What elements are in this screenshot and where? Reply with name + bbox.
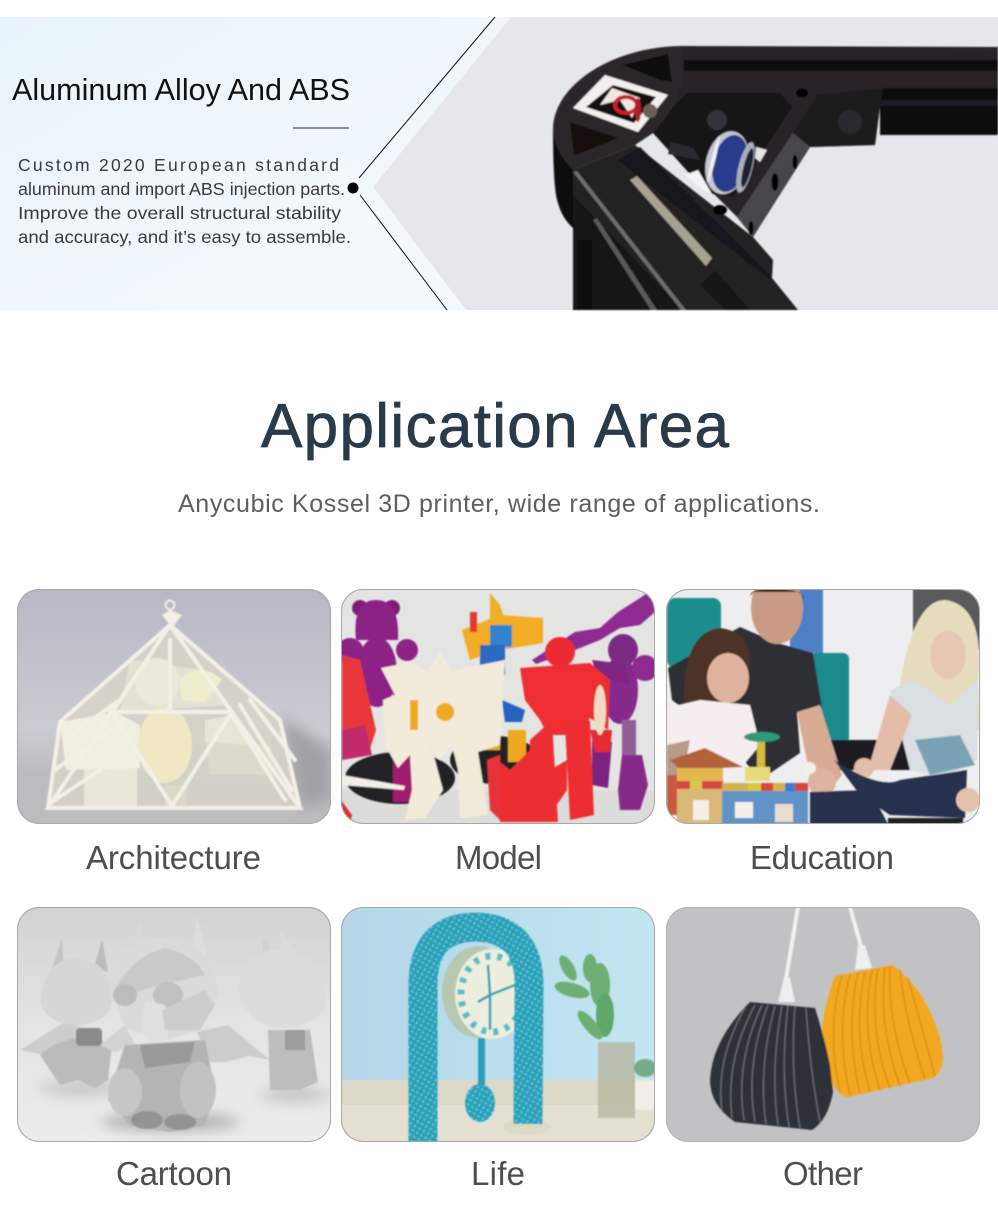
connector lines <box>359 17 495 310</box>
center helmet <box>122 1012 193 1038</box>
center wings <box>197 1025 270 1062</box>
arch <box>423 927 529 1142</box>
aluminum extrusion cross-section <box>573 75 668 132</box>
orange lamp <box>821 965 943 1097</box>
banner body copy: Improve the overall structural stability <box>18 203 341 223</box>
card: other <box>666 907 980 1192</box>
yellow robot <box>462 615 543 660</box>
card: architecture <box>17 589 331 876</box>
card: life <box>341 907 656 1192</box>
bracket window <box>653 93 792 197</box>
cords <box>785 907 798 985</box>
right grey photo background <box>373 17 998 310</box>
right figure <box>280 930 296 965</box>
bracket plate <box>653 83 883 237</box>
white robot <box>381 652 505 820</box>
card: model <box>336 589 658 876</box>
purple bear <box>352 600 368 616</box>
purple sword <box>532 590 655 664</box>
card: cartoon <box>17 907 331 1192</box>
diagonal rail <box>573 145 798 310</box>
photo: turquoise clock arch on pale blue wall <box>341 907 656 1142</box>
card: education <box>666 572 980 876</box>
plant <box>553 953 614 1043</box>
black lamp <box>710 1002 833 1130</box>
vertical column <box>573 170 720 310</box>
screw heads <box>707 110 727 130</box>
label: Architecture <box>86 839 261 876</box>
banner heading: Aluminum Alloy And ABS <box>12 72 350 107</box>
lego house <box>677 780 723 824</box>
label: Model <box>455 839 542 876</box>
red skull robot <box>487 755 500 820</box>
banner body copy: Custom 2020 European standard <box>18 155 339 175</box>
photo: family building blocks <box>666 572 980 825</box>
label: Education <box>750 839 894 876</box>
bolt <box>643 104 657 118</box>
legs <box>834 760 967 818</box>
banner body copy: aluminum and import ABS injection parts. <box>18 179 345 199</box>
left figure <box>21 1023 81 1054</box>
black bases <box>345 752 455 804</box>
card frame <box>666 590 980 824</box>
card frame <box>342 590 654 824</box>
card frame <box>666 908 980 1142</box>
red wire <box>615 97 637 113</box>
top rail <box>680 46 998 135</box>
lit bracket side <box>737 133 810 237</box>
card frame <box>18 590 330 824</box>
photo: grey printed chibi figures <box>17 907 331 1142</box>
pendulum <box>478 1038 485 1088</box>
right purple figure <box>608 660 639 725</box>
banner body copy <box>18 155 351 247</box>
photo: pendant lamps <box>666 907 980 1142</box>
triangular cutouts in fan <box>622 54 672 82</box>
banner body copy: and accuracy, and it’s easy to assemble. <box>18 227 351 247</box>
heading underline <box>293 128 349 129</box>
photo: white printed pyramid house <box>17 589 331 824</box>
card frame <box>18 908 330 1142</box>
section title: Application Area <box>261 392 730 461</box>
white behind pulley <box>685 170 712 194</box>
woman <box>897 600 980 730</box>
connector dot <box>348 182 358 194</box>
photo: colourful printed figures <box>336 589 658 824</box>
girl <box>684 628 750 705</box>
label: Cartoon <box>116 1155 232 1192</box>
center body <box>108 1040 215 1132</box>
label: Other <box>783 1155 863 1192</box>
corner bracket fan <box>553 46 682 170</box>
side curve of bracket <box>553 127 573 228</box>
left text panel background <box>0 17 520 310</box>
center figure horns <box>122 922 145 965</box>
vase <box>598 1042 635 1118</box>
card frame <box>342 908 654 1142</box>
left red figure <box>342 655 376 757</box>
section subtitle: Anycubic Kossel 3D printer, wide range of applications. <box>178 490 820 518</box>
clock <box>442 946 490 1039</box>
panel: aluminum alloy feature banner <box>0 17 998 310</box>
man <box>668 627 822 780</box>
label: Life <box>471 1155 525 1192</box>
idler cylinder <box>668 142 700 160</box>
blue pulley wheel <box>699 127 760 200</box>
arch base <box>504 1120 550 1134</box>
right bracket block <box>793 88 882 147</box>
photo: black aluminum frame corner <box>553 46 998 310</box>
